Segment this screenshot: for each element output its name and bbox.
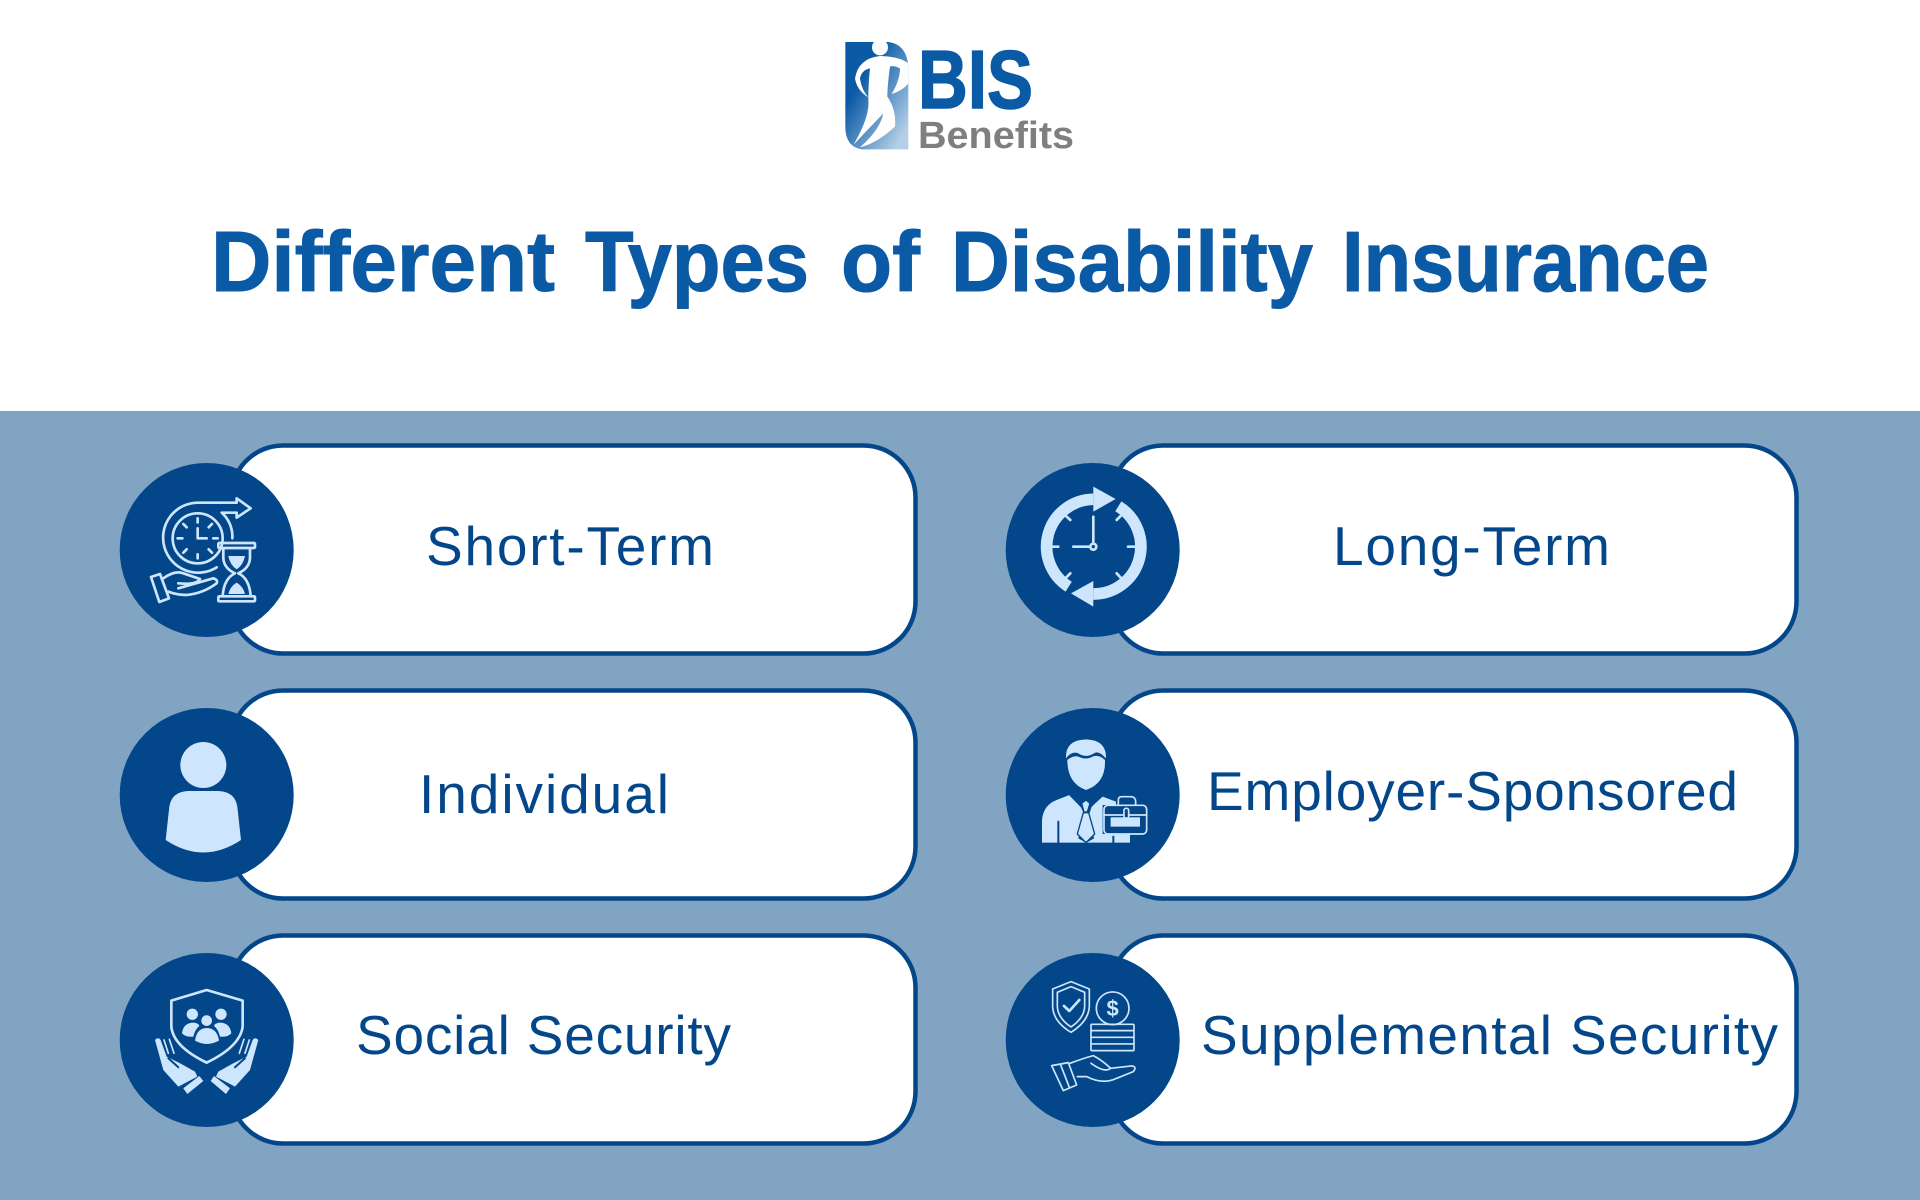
- card: Employer-Sponsored: [1006, 690, 1796, 898]
- label: Supplemental Security: Supplemental Security: [1201, 1004, 1778, 1066]
- label: Long-Term: Long-Term: [1333, 515, 1610, 577]
- logo wordmark: Benefits: Benefits: [918, 115, 1074, 157]
- title: Disability: [951, 215, 1313, 310]
- logo mark: runner shield: [845, 38, 908, 149]
- card: Long-Term: [1006, 446, 1796, 654]
- label: Individual: Individual: [419, 763, 669, 825]
- icon: shield, coin stack and hand: [1052, 982, 1135, 1091]
- card: Short-Term: [120, 446, 915, 654]
- icon: employee with briefcase: [1042, 739, 1147, 843]
- title: Different: [211, 215, 555, 310]
- icon: circular arrows clock: [1047, 487, 1141, 607]
- logo wordmark: BIS: BIS: [918, 33, 1033, 126]
- title: Types: [585, 215, 809, 310]
- title: of: [841, 215, 921, 310]
- label: Social Security: Social Security: [356, 1004, 732, 1066]
- label: Short-Term: Short-Term: [426, 515, 714, 577]
- icon: person: [166, 742, 241, 852]
- card: Individual: [120, 690, 915, 898]
- card: Social Security: [120, 936, 915, 1144]
- logo: BIS Benefits: [845, 33, 1074, 157]
- card: Supplemental Security: [1006, 936, 1796, 1144]
- panel: blue background: [0, 411, 1920, 1200]
- label: Employer-Sponsored: Employer-Sponsored: [1207, 760, 1738, 822]
- icon: clock, hourglass and hand: [151, 498, 255, 602]
- icon: shield, coin stack and hand: $: [1107, 996, 1119, 1021]
- icon: shield with people and hands: [155, 990, 258, 1094]
- title: Insurance: [1342, 215, 1709, 310]
